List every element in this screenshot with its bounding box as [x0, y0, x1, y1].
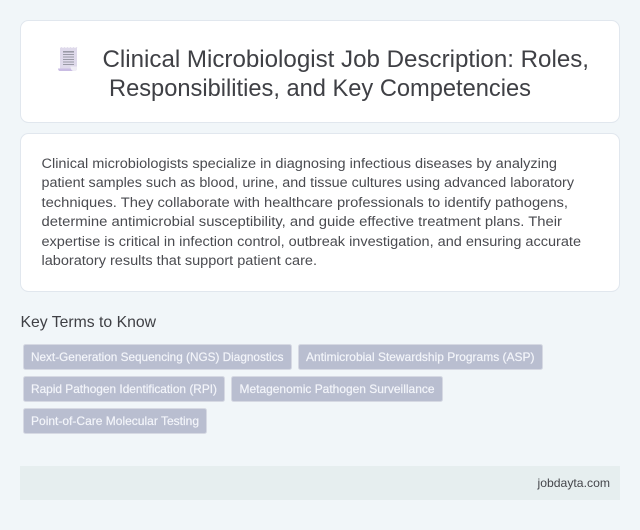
icon: document scroll [58, 47, 78, 71]
text block: description [42, 156, 581, 269]
heading: key terms: Key Terms to Know [20, 314, 156, 331]
tag: point-of-care testing [24, 408, 206, 434]
title [102, 46, 589, 102]
tag: NGS diagnostics: Next-Generation Sequencing (NGS) Diagnostics [31, 350, 284, 364]
text block: description: Clinical microbiologists specialize in diagnosing infectious diseases by analyzing [42, 156, 557, 172]
footer [20, 466, 620, 500]
panel: description [20, 134, 620, 292]
title: Clinical Microbiologist Job Description: Roles, [102, 46, 589, 73]
tag: NGS diagnostics [24, 344, 292, 370]
text block: description: laboratory results that support patient care. [42, 253, 317, 269]
text block: description: expertise is critical in infection control, outbreak investigation, and ensuring accurate [42, 234, 581, 250]
tag: metagenomic surveillance [232, 376, 442, 402]
text block: description: patient samples such as blood, urine, and tissue cultures using advanced laboratory [42, 175, 575, 191]
tag: metagenomic surveillance: Metagenomic Pathogen Surveillance [240, 382, 435, 396]
tag: antimicrobial stewardship [298, 344, 542, 370]
tag: rapid pathogen identification: Rapid Pathogen Identification (RPI) [31, 382, 217, 396]
panel: header [20, 20, 620, 122]
footer text: jobdayta.com [536, 476, 610, 490]
tag: point-of-care testing: Point-of-Care Molecular Testing [31, 414, 199, 428]
title: Responsibilities, and Key Competencies [109, 75, 531, 102]
tag: rapid pathogen identification [24, 376, 224, 402]
text block: description: techniques. They collaborate with healthcare professionals to identify pathogens, [42, 195, 568, 211]
tag: antimicrobial stewardship: Antimicrobial Stewardship Programs (ASP) [306, 350, 534, 364]
text block: description: determine antimicrobial susceptibility, and guide effective treatment plans. Their [42, 214, 562, 230]
